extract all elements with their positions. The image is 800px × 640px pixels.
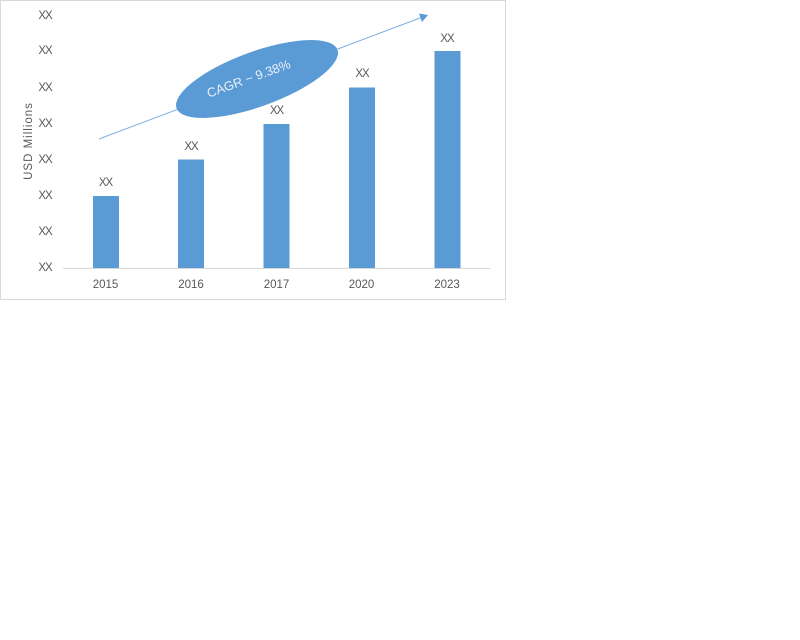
y axis title: USD Millions [23,102,35,180]
y axis labels: XX [38,262,53,274]
y axis labels: XX [38,190,53,202]
y axis labels: XX [38,118,53,130]
bar value labels: XX [355,68,370,80]
y axis labels: XX [38,226,53,238]
x axis labels: 2020 [349,279,374,291]
chart frame [0,0,506,300]
bar value labels: XX [184,141,199,153]
x axis labels [93,279,460,291]
y axis labels [38,10,53,274]
y axis labels: XX [38,10,53,22]
bars [93,51,460,268]
x axis labels: 2015 [93,279,118,291]
bar value labels: XX [440,33,455,45]
y axis labels: XX [38,82,53,94]
x axis labels: 2023 [434,279,460,291]
x axis line [63,268,490,270]
y axis labels: XX [38,154,53,166]
growth arrow [99,14,428,139]
bar value labels: XX [270,105,284,117]
x axis labels: 2017 [264,279,289,291]
x axis labels: 2016 [178,279,204,291]
bar value labels [99,33,455,189]
y axis labels: XX [38,45,53,57]
bar value labels: XX [99,177,113,189]
CAGR callout: CAGR ~ 9.38% [205,56,292,101]
CAGR callout [167,24,347,134]
